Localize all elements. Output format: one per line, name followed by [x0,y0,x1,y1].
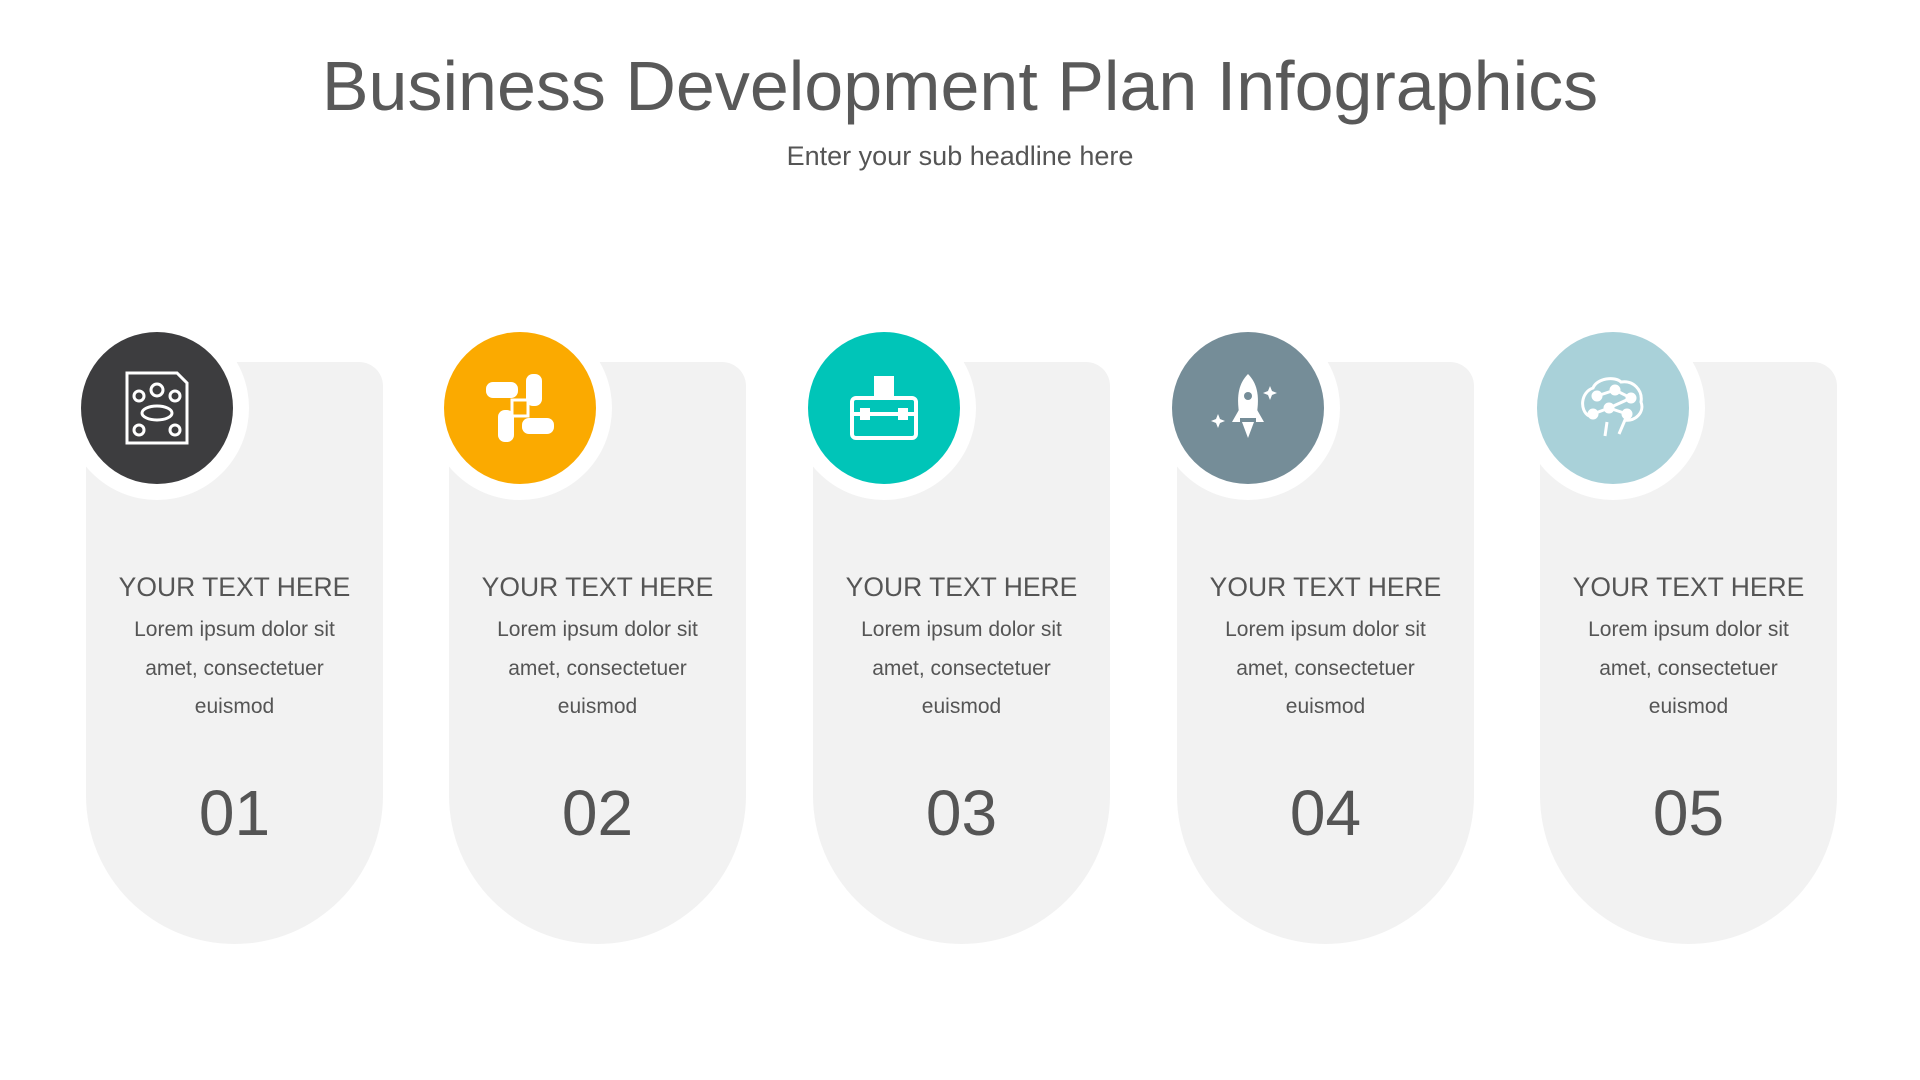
body 2: Lorem ipsum dolor sit [497,618,698,641]
ring 3 [792,316,976,500]
card background 3 [813,362,1110,944]
ring 4 [1156,316,1340,500]
icon: hands teamwork [444,332,596,484]
heading 5: YOUR TEXT HERE [1573,572,1804,602]
card background 1 [86,362,383,944]
panel: card 1 [81,332,383,944]
heading 2: YOUR TEXT HERE [482,572,713,602]
body 5 [1588,618,1789,718]
panel: card 3 [808,332,1110,944]
heading 1: YOUR TEXT HERE [119,572,350,602]
icon: briefcase [808,332,960,484]
panel: card 5 [1537,332,1837,944]
body 5: Lorem ipsum dolor sit [1588,618,1789,641]
body 1: Lorem ipsum dolor sit [134,618,335,641]
icon: document diagram [81,332,233,484]
card background 2 [449,362,746,944]
body 2 [497,618,698,718]
card background 5 [1540,362,1837,944]
number 3: 03 [926,777,997,849]
body 2: amet, consectetuer [508,656,687,680]
body 3: Lorem ipsum dolor sit [861,618,1062,641]
body 4: Lorem ipsum dolor sit [1225,618,1426,641]
title: Business Development Plan Infographics [322,47,1598,125]
subtitle: Enter your sub headline here [787,141,1133,171]
body 2: euismod [558,695,637,718]
number 2: 02 [562,777,633,849]
body 4: amet, consectetuer [1236,656,1415,680]
ring 1 [65,316,249,500]
number 4: 04 [1290,777,1361,849]
body 1 [134,618,335,718]
icon: brain network [1537,332,1689,484]
number 5: 05 [1653,777,1724,849]
body 4 [1225,618,1426,718]
body 3: amet, consectetuer [872,656,1051,680]
icon: rocket [1172,332,1324,484]
ring 5 [1521,316,1705,500]
body 3: euismod [922,695,1001,718]
body 3 [861,618,1062,718]
ring 2 [428,316,612,500]
body 1: amet, consectetuer [145,656,324,680]
panel: card 4 [1172,332,1474,944]
body 5: euismod [1649,695,1728,718]
heading 4: YOUR TEXT HERE [1210,572,1441,602]
number 1: 01 [199,777,270,849]
heading 3: YOUR TEXT HERE [846,572,1077,602]
body 1: euismod [195,695,274,718]
body 5: amet, consectetuer [1599,656,1778,680]
panel: card 2 [444,332,746,944]
card background 4 [1177,362,1474,944]
body 4: euismod [1286,695,1365,718]
